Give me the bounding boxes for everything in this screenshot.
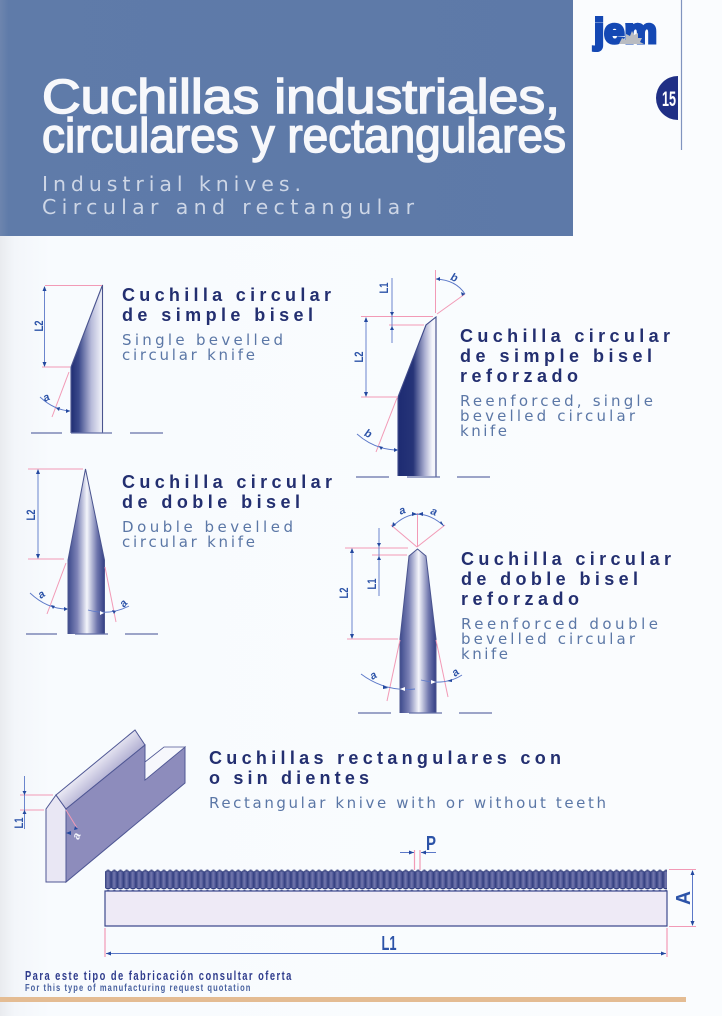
text: reinforced single bevelled knife: knife <box>460 422 507 440</box>
teeth strip <box>105 869 667 891</box>
text: single bevelled knife <box>122 285 331 364</box>
rectangular knife 3D diagram: a <box>70 831 84 841</box>
rectangular knife 3D diagram <box>14 730 185 882</box>
knife diagram: reinforced double bevelled: L2 <box>339 588 351 598</box>
title: Cuchillas industriales, <box>42 71 560 124</box>
text: reinforced double bevelled knife: de doble bisel <box>461 569 638 589</box>
bevel face <box>56 730 145 809</box>
logo: jem: jem <box>593 12 657 51</box>
text: reinforced single bevelled knife: bevelled circular <box>460 407 636 425</box>
text: reinforced single bevelled knife: Cuchilla circular <box>460 326 670 346</box>
knife diagram: reinforced double bevelled: a <box>449 666 462 679</box>
knife diagram: reinforced single bevelled: b <box>362 427 374 441</box>
page number badge <box>656 76 678 120</box>
text: rectangular knife: Cuchillas rectangulares con <box>209 748 561 768</box>
knife diagram: single bevelled <box>31 285 163 433</box>
knife diagram: reinforced single bevelled: L1 <box>379 282 391 294</box>
footer bar <box>0 997 686 1002</box>
page marker line <box>680 0 682 150</box>
title <box>42 71 566 163</box>
text: reinforced double bevelled knife <box>461 549 671 663</box>
title: circulares y rectangulares <box>42 110 566 163</box>
text: reinforced single bevelled knife: Reenforced, single <box>460 392 653 410</box>
toothed knife diagram <box>105 833 696 957</box>
text: reinforced double bevelled knife: bevelled circular <box>461 630 636 648</box>
toothed knife diagram: L1 <box>382 933 396 955</box>
notch <box>145 747 185 780</box>
knife diagram: reinforced single bevelled <box>354 270 490 477</box>
knife diagram: reinforced double bevelled: L1 <box>367 578 379 590</box>
page number badge: 15 <box>662 88 676 111</box>
knife diagram: reinforced single bevelled: b <box>449 271 459 285</box>
knife diagram: double bevelled <box>26 469 158 634</box>
text: reinforced single bevelled knife <box>460 326 670 440</box>
knife diagram: reinforced double bevelled: a <box>368 669 379 683</box>
text: double bevelled knife <box>122 472 332 551</box>
toothed knife diagram: A <box>673 891 695 905</box>
footer note: For this type of manufacturing request quotation <box>25 982 251 993</box>
footer note <box>25 970 292 993</box>
knife diagram: reinforced double bevelled: a <box>397 504 407 518</box>
text: reinforced double bevelled knife: Reenforced double <box>461 615 658 633</box>
text: single bevelled knife: Single bevelled <box>122 331 283 349</box>
rectangular knife 3D diagram: L1 <box>14 817 26 828</box>
text: reinforced single bevelled knife: de simple bisel <box>460 346 652 366</box>
text: double bevelled knife: Cuchilla circular <box>122 472 332 492</box>
knife diagram: reinforced double bevelled: a <box>429 505 439 519</box>
knife diagram: reinforced single bevelled: L2 <box>354 352 366 362</box>
blade body <box>105 891 667 926</box>
text: reinforced double bevelled knife: reforzado <box>461 589 579 609</box>
knife diagram: double bevelled: a <box>36 588 48 601</box>
text: double bevelled knife: Double bevelled <box>122 518 293 536</box>
text: reinforced double bevelled knife: Cuchilla circular <box>461 549 671 569</box>
text: single bevelled knife: Cuchilla circular <box>122 285 331 305</box>
text: rectangular knife <box>209 748 606 812</box>
toothed knife diagram: P <box>426 833 436 855</box>
footer note: Para este tipo de fabricación consultar oferta <box>25 970 292 983</box>
text: double bevelled knife: de doble bisel <box>122 492 300 512</box>
knife diagram: reinforced double bevelled <box>339 504 492 713</box>
knife diagram: single bevelled: L2 <box>34 320 46 332</box>
knife diagram: double bevelled: a <box>117 597 130 610</box>
text: rectangular knife: o sin dientes <box>209 768 369 788</box>
text: single bevelled knife: circular knife <box>122 346 255 364</box>
knife diagram: double bevelled: L2 <box>26 510 38 520</box>
text: reinforced double bevelled knife: knife <box>461 645 508 663</box>
text: single bevelled knife: de simple bisel <box>122 305 313 325</box>
side face <box>66 745 185 882</box>
subtitle: Industrial knives. <box>42 172 301 196</box>
end face <box>46 795 66 882</box>
text: reinforced single bevelled knife: reforzado <box>460 366 578 386</box>
text: rectangular knife: Rectangular knive with or without teeth <box>209 794 606 812</box>
subtitle <box>42 172 415 219</box>
knife diagram: single bevelled: a <box>41 391 52 405</box>
header banner <box>0 0 573 236</box>
subtitle: Circular and rectangular <box>42 195 415 219</box>
text: double bevelled knife: circular knife <box>122 533 255 551</box>
